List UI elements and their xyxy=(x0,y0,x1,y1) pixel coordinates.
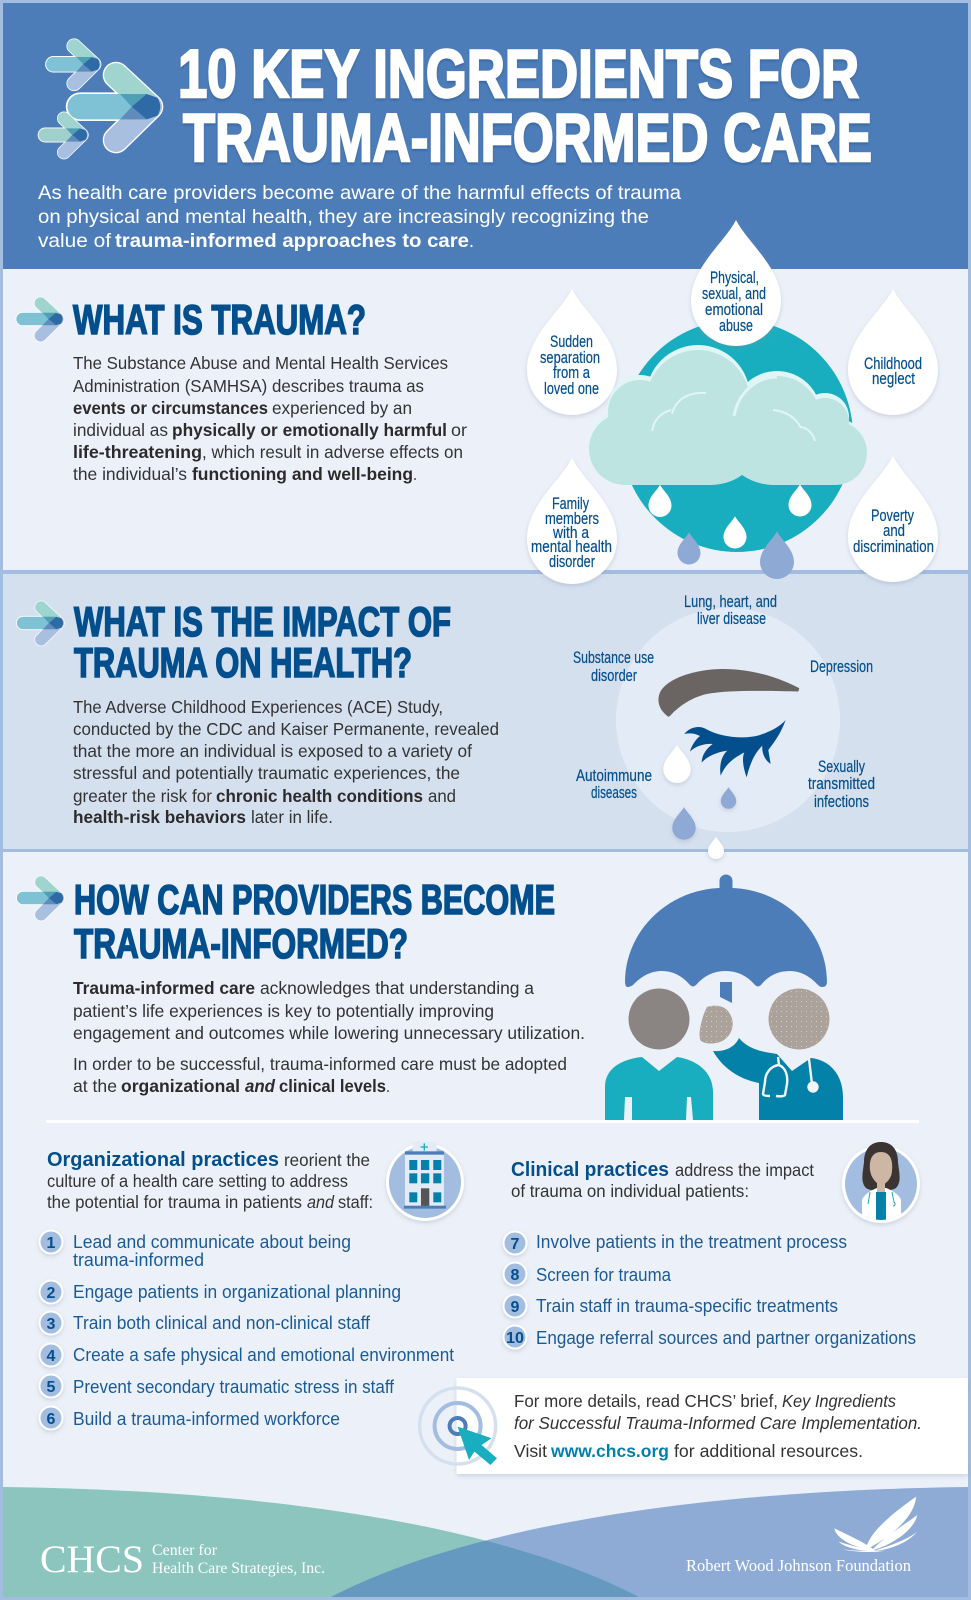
list items 7 to 10: Screen for trauma xyxy=(536,1265,672,1285)
health condition labels: infections xyxy=(814,792,869,811)
body text: patient’s life experiences is key to potentially improving xyxy=(73,1001,494,1021)
health condition labels xyxy=(573,592,875,811)
body text: . xyxy=(386,1076,390,1096)
header: arrows icon xyxy=(45,46,160,152)
body text: . xyxy=(413,464,417,484)
callout text: For more details, read CHCS’ brief, xyxy=(514,1391,778,1411)
drop: family members xyxy=(527,458,617,584)
drop: childhood neglect: Childhood xyxy=(864,354,922,373)
health condition labels: transmitted xyxy=(808,774,875,793)
body text: chronic health conditions xyxy=(216,786,423,806)
heading: TRAUMA-INFORMED? xyxy=(74,920,408,967)
intro text: Organizational practices xyxy=(47,1149,279,1171)
list items 1 to 6: Lead and communicate about being xyxy=(73,1232,351,1252)
heading: TRAUMA ON HEALTH? xyxy=(74,639,412,686)
body text: life-threatening xyxy=(73,442,202,462)
title xyxy=(178,36,872,176)
health condition labels: disorder xyxy=(591,666,637,685)
list items 1 to 6: 2 xyxy=(47,1285,56,1302)
drop: family members: with a xyxy=(552,523,589,542)
body text: and xyxy=(428,786,456,806)
heading xyxy=(74,598,451,686)
arrow icon xyxy=(23,882,63,915)
section 1: what is trauma xyxy=(23,296,467,484)
footer overlap xyxy=(331,1540,639,1597)
header panel background xyxy=(3,3,968,269)
patient xyxy=(605,988,713,1120)
heading xyxy=(74,876,555,967)
intro text: As health care providers become aware of the harmful effects of trauma xyxy=(38,182,681,204)
list items 7 to 10: Engage referral sources and partner organizations xyxy=(536,1328,916,1348)
body text: Trauma-informed care xyxy=(73,978,255,998)
callout text: Key Ingredients xyxy=(782,1391,896,1411)
body text: Administration (SAMHSA) describes trauma as xyxy=(73,376,424,396)
list items 1 to 6: Engage patients in organizational planning xyxy=(73,1282,401,1302)
list items 1 to 6: 5 xyxy=(47,1379,56,1396)
drop: family members: Family xyxy=(552,494,589,513)
body text xyxy=(73,353,467,484)
blue rain drops xyxy=(678,531,794,579)
list items 7 to 10: 7 xyxy=(511,1236,520,1253)
body text: physically or emotionally harmful xyxy=(172,420,447,440)
logo: CHCS: CHCS xyxy=(40,1538,144,1581)
umbrella handle xyxy=(720,982,732,1003)
callout: more details xyxy=(420,1378,968,1474)
callout text: for additional resources. xyxy=(674,1441,863,1461)
drop: poverty: and xyxy=(883,521,905,540)
drop: physical abuse: emotional xyxy=(705,300,763,319)
section 3: how providers become trauma-informed xyxy=(23,876,585,1096)
white divider xyxy=(46,1120,919,1123)
umbrella illustration xyxy=(605,875,843,1120)
intro text xyxy=(511,1159,814,1201)
body text: engagement and outcomes while lowering unnecessary utilization. xyxy=(73,1023,585,1043)
health condition labels: diseases xyxy=(591,783,637,802)
list items 7 to 10: Train staff in trauma-specific treatments xyxy=(536,1296,838,1316)
body text: events or circumstances xyxy=(73,398,268,418)
list items 1 to 6: Build a trauma-informed workforce xyxy=(73,1409,340,1429)
list items 1 to 6: 1 xyxy=(47,1235,56,1252)
health condition labels: Depression xyxy=(810,657,873,676)
list items 1 to 6: trauma-informed xyxy=(73,1250,204,1270)
list items 7 to 10 xyxy=(502,1230,916,1350)
intro text: staff: xyxy=(338,1192,373,1212)
teal circle xyxy=(621,320,853,552)
drop: childhood neglect: neglect xyxy=(872,369,915,388)
icon: hospital xyxy=(386,1142,464,1221)
body text: , which result in adverse effects on xyxy=(202,442,463,462)
drop: physical abuse: Physical, xyxy=(710,268,759,287)
list items 1 to 6: 4 xyxy=(47,1348,56,1365)
drop: physical abuse: sexual, and xyxy=(702,284,766,303)
health condition labels: Lung, heart, and xyxy=(684,592,777,611)
drop: family members: members xyxy=(545,509,599,528)
list items 7 to 10: 8 xyxy=(511,1267,520,1284)
heading: WHAT IS THE IMPACT OF xyxy=(74,598,451,645)
section 2: impact on health xyxy=(23,598,499,827)
footer xyxy=(3,1487,968,1597)
list items 1 to 6: Prevent secondary traumatic stress in staff xyxy=(73,1377,395,1397)
callout text: Visit xyxy=(514,1441,547,1461)
umbrella canopy xyxy=(625,875,827,987)
intro text: on physical and mental health, they are increasingly recognizing the xyxy=(38,206,649,228)
stethoscope xyxy=(763,1057,818,1096)
body text: organizational xyxy=(121,1076,240,1096)
body text xyxy=(73,978,585,1096)
body text: The Substance Abuse and Mental Health Services xyxy=(73,353,448,373)
logo: CHCS: Center for xyxy=(152,1542,218,1559)
cloud illustration xyxy=(527,220,938,584)
section 2 panel background xyxy=(3,574,968,849)
doctor xyxy=(700,988,843,1120)
drop: childhood neglect xyxy=(848,289,938,415)
body text: In order to be successful, trauma-informed care must be adopted xyxy=(73,1054,567,1074)
cloud xyxy=(589,345,867,485)
callout text xyxy=(514,1391,922,1461)
body text: that the more an individual is exposed to a variety of xyxy=(73,741,472,761)
intro text: and xyxy=(307,1192,335,1212)
eyelashes xyxy=(684,720,786,777)
body text: The Adverse Childhood Experiences (ACE) Study, xyxy=(73,697,443,717)
health condition labels: Autoimmune xyxy=(576,766,652,785)
drop: sudden separation: Sudden xyxy=(550,332,593,351)
arrow icon xyxy=(23,607,63,640)
list items 1 to 6: Create a safe physical and emotional environment xyxy=(73,1345,454,1365)
list items 7 to 10: 9 xyxy=(511,1299,520,1316)
intro text: address the impact xyxy=(675,1160,814,1180)
pale circle xyxy=(616,608,840,832)
body text: clinical levels xyxy=(279,1076,386,1096)
tears xyxy=(663,745,736,859)
intro text xyxy=(38,182,681,252)
footer green curve xyxy=(3,1487,639,1597)
white rain drops xyxy=(648,484,812,548)
list items 1 to 6: Train both clinical and non-clinical staff xyxy=(73,1313,371,1333)
intro text: Clinical practices xyxy=(511,1159,669,1181)
drop: family members: disorder xyxy=(549,552,595,571)
list items 1 to 6: 6 xyxy=(47,1411,56,1428)
logo: CHCS: Health Care Strategies, Inc. xyxy=(152,1560,325,1577)
body text: conducted by the CDC and Kaiser Permanente, revealed xyxy=(73,719,499,739)
body text: experienced by an xyxy=(272,398,412,418)
intro text: the potential for trauma in patients xyxy=(47,1192,302,1212)
list items 1 to 6: 3 xyxy=(47,1316,56,1333)
drop: family members: mental health xyxy=(531,537,612,556)
callout text: www.chcs.org xyxy=(550,1441,669,1461)
drop: poverty: Poverty xyxy=(871,506,914,525)
intro text: trauma-informed approaches to care xyxy=(115,230,469,252)
icon: target with cursor xyxy=(420,1388,497,1465)
section 1 panel background xyxy=(3,269,968,570)
body text: and xyxy=(245,1076,275,1096)
clinical practices xyxy=(502,1142,920,1350)
body text: later in life. xyxy=(251,807,333,827)
body text: stressful and potentially traumatic experiences, the xyxy=(73,763,460,783)
list items 1 to 6 xyxy=(38,1230,454,1430)
list items 7 to 10: 10 xyxy=(506,1330,524,1347)
body text: individual as xyxy=(73,420,168,440)
body text: health-risk behaviors xyxy=(73,807,246,827)
body text: at the xyxy=(73,1076,117,1096)
heading: WHAT IS TRAUMA? xyxy=(73,296,366,343)
drop: sudden separation: loved one xyxy=(544,379,599,398)
body text: or xyxy=(451,420,467,440)
body text: the individual’s xyxy=(73,464,187,484)
health condition labels: Substance use xyxy=(573,648,654,667)
drop: physical abuse xyxy=(691,220,781,346)
intro text xyxy=(47,1149,373,1212)
intro text: reorient the xyxy=(284,1150,370,1170)
intro text: value of xyxy=(38,230,112,252)
arrow icon xyxy=(23,303,63,336)
body text: functioning and well-being xyxy=(192,464,413,484)
section 3 panel background xyxy=(3,852,968,1597)
drop: physical abuse: abuse xyxy=(719,316,753,335)
eyebrow xyxy=(658,669,799,717)
body text: acknowledges that understanding a xyxy=(260,978,534,998)
organizational practices xyxy=(38,1142,464,1430)
health condition labels: liver disease xyxy=(697,609,766,628)
body text: greater the risk for xyxy=(73,786,212,806)
logo: Robert Wood Johnson Foundation: Robert Wood Johnson Foundation xyxy=(686,1556,911,1575)
callout text: for Successful Trauma-Informed Care Implementation. xyxy=(514,1413,922,1433)
eye illustration xyxy=(573,592,875,859)
drop: sudden separation: from a xyxy=(553,363,590,382)
footer blue curve xyxy=(331,1487,968,1597)
intro text: . xyxy=(469,230,474,252)
icon: doctor xyxy=(842,1142,920,1225)
drop: poverty xyxy=(848,456,938,582)
body text xyxy=(73,697,499,827)
health condition labels: Sexually xyxy=(818,757,865,776)
drop: poverty: discrimination xyxy=(853,537,934,556)
logo: Robert Wood Johnson Foundation xyxy=(686,1497,917,1575)
heading: HOW CAN PROVIDERS BECOME xyxy=(74,876,555,923)
logo: CHCS xyxy=(40,1538,325,1581)
list items 7 to 10: Involve patients in the treatment process xyxy=(536,1232,847,1252)
intro text: of trauma on individual patients: xyxy=(511,1181,749,1201)
drop: sudden separation xyxy=(527,289,617,415)
intro text: culture of a health care setting to address xyxy=(47,1171,348,1191)
drop: sudden separation: separation xyxy=(540,348,600,367)
